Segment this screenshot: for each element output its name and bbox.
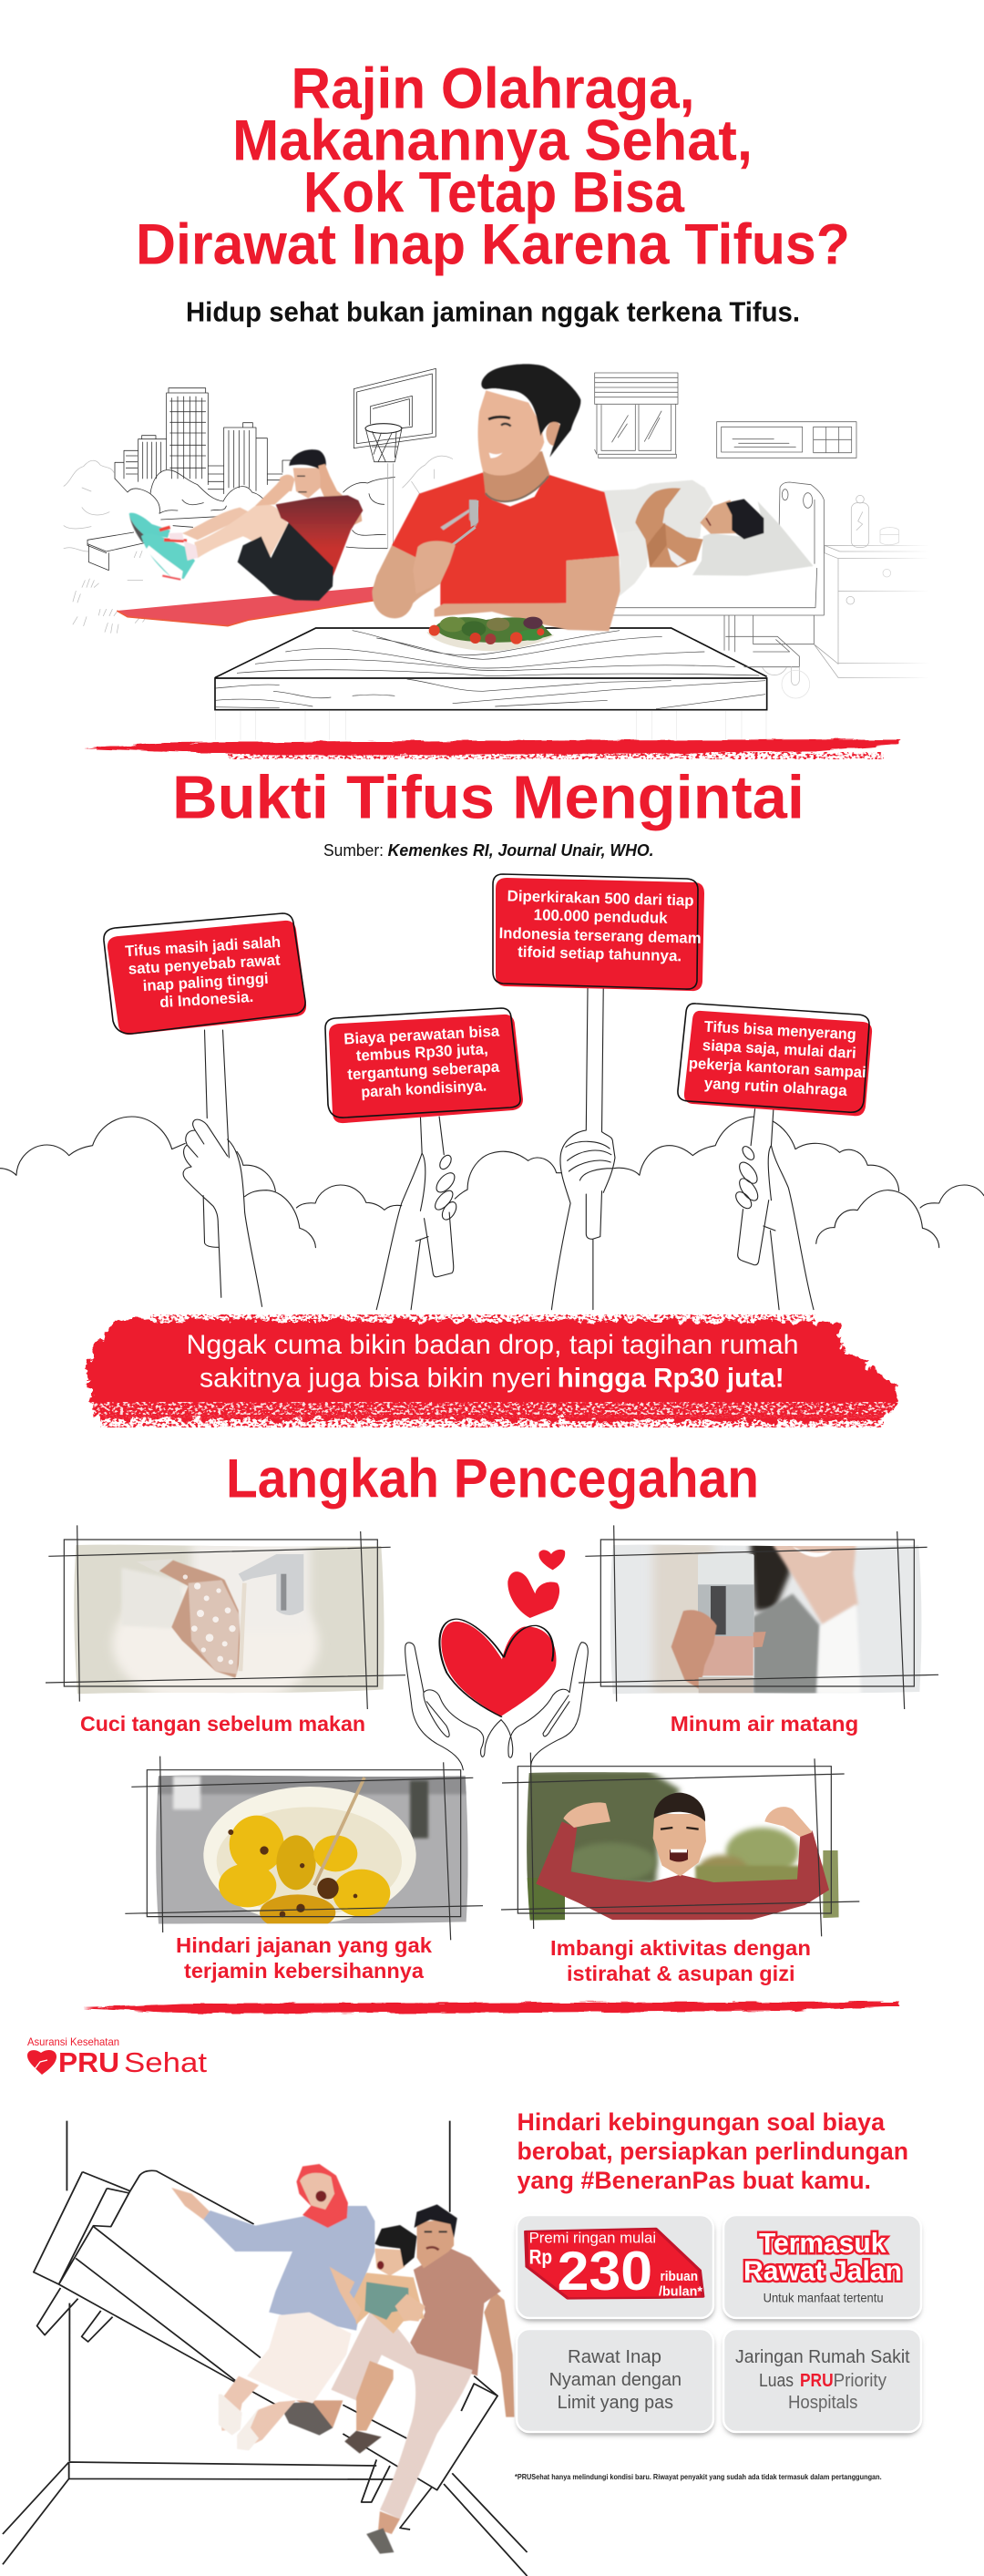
icon: hands outline mirrored [501, 1643, 588, 1766]
sign 4: Tifus bisa menyerang [703, 1018, 856, 1043]
clouds right [492, 1117, 984, 1248]
photo: street food dumplings [152, 1771, 474, 1931]
icon: grass tufts [73, 551, 146, 633]
frame lines: photo 2 [579, 1525, 938, 1709]
subtitle: Hidup sehat bukan jaminan nggak terkena Tifus. [186, 295, 800, 328]
frame lines: photo 3 [125, 1757, 483, 1940]
hand and pole 4 [733, 1109, 814, 1310]
red brush divider bottom [84, 2002, 899, 2014]
clouds left [0, 1117, 492, 1248]
person: sick man sleeping in bed [601, 480, 814, 599]
card: outpatient: Untuk manfaat tertentu [764, 2290, 884, 2304]
logo: PRUSehat: Asuransi Kesehatan [27, 2035, 119, 2048]
clouds and hands right [492, 987, 984, 1310]
logo: PRUSehat: PRU [58, 2046, 119, 2078]
icon: window with blinds [595, 373, 678, 458]
icon: hospital bed frame [610, 482, 824, 698]
icon: hands outline [405, 1643, 501, 1770]
caption 2: Minum air matang [671, 1712, 858, 1736]
photo: drinking water [604, 1540, 927, 1698]
source line: Kemenkes RI, Journal Unair, WHO. [388, 841, 654, 860]
sign 2: tergantung seberapa [347, 1058, 500, 1083]
card: hospital network: Jaringan Rumah Sakit [735, 2347, 910, 2367]
card: inpatient: Rawat Inap [568, 2347, 661, 2367]
caption 3 [176, 1933, 432, 1983]
icon: park bench [87, 517, 219, 571]
person: father [279, 2204, 515, 2554]
sign 3: 100.000 penduduk [533, 906, 668, 927]
title: Dirawat Inap Karena Tifus? [136, 213, 850, 277]
card: hospital network: Hospitals [788, 2393, 857, 2413]
icon: medium heart [507, 1571, 559, 1618]
person: man doing sit-ups [129, 449, 363, 601]
card: premium: Premi ringan mulai [529, 2230, 656, 2246]
heading: Langkah Pencegahan: Langkah Pencegahan [226, 1448, 759, 1510]
fork and hand [413, 500, 478, 594]
frame lines: photo 4 [501, 1753, 859, 1936]
sign 4: siapa saja, mulai dari [702, 1036, 856, 1062]
illustration: heart in hands [405, 1550, 588, 1770]
hero illustration: hospital room and sick man [372, 364, 929, 698]
icon: large heart [439, 1619, 557, 1717]
banner: red brush callout: Nggak cuma bikin badan drop, tapi tagihan rumah [186, 1330, 798, 1360]
logo: PRUSehat: Sehat [124, 2046, 207, 2078]
sign 1: satu penyebab rawat [128, 951, 281, 978]
sign 1: inap paling tinggi [142, 970, 269, 994]
family on sliding bed [171, 2164, 515, 2554]
sign 3: Indonesia terserang demam [498, 924, 702, 947]
icon: bushes [64, 456, 453, 551]
photo: man flexing muscles [522, 1768, 845, 1923]
banner: red brush callout: sakitnya juga bisa bikin nyeri [200, 1364, 551, 1393]
sign 2: Biaya perawatan bisa [343, 1023, 500, 1047]
person: central man eating salad [372, 364, 620, 631]
exercise mat [117, 586, 376, 626]
icon: basketball hoop [354, 368, 436, 549]
logo: PRUSehat [27, 2035, 207, 2078]
clouds and hands left [0, 1030, 492, 1310]
icon: small heart [538, 1550, 565, 1570]
card: inpatient: Limit yang pas [558, 2393, 673, 2413]
illustration: tilted bed and room outline [3, 2121, 528, 2576]
sign 3: tifoid setiap tahunnya. [518, 943, 682, 964]
title [136, 57, 850, 277]
card: hospital network [723, 2329, 921, 2435]
headline: protection call to action: Hindari kebingungan soal biaya [518, 2108, 886, 2136]
card: premium [517, 2215, 713, 2321]
headline: protection call to action [518, 2108, 908, 2194]
red brush divider top [84, 739, 899, 759]
sign 1 [104, 913, 306, 1035]
card: inpatient: Nyaman dengan [549, 2370, 682, 2390]
sign 2: parah kondisinya. [361, 1077, 487, 1101]
sign 4: pekerja kantoran sampai [688, 1055, 866, 1081]
card: outpatient [723, 2215, 921, 2321]
source line: Sumber: [323, 841, 384, 860]
caption 4 [550, 1936, 811, 1985]
heading: Bukti Tifus Mengintai: Bukti Tifus Mengintai [172, 764, 805, 831]
hand and pole 3 [551, 987, 615, 1310]
icon: air conditioner panel [717, 422, 856, 458]
sign 3 [493, 874, 704, 991]
card: hospital network: PRU [800, 2371, 834, 2391]
card: inpatient [517, 2329, 713, 2435]
caption 3: Hindari jajanan yang gak [176, 1933, 432, 1957]
sign 2 [325, 1008, 523, 1123]
title: Rajin Olahraga, [292, 57, 694, 120]
sign 1: di Indonesia. [159, 988, 254, 1011]
photo: washing hands [74, 1544, 384, 1694]
banner: red brush callout [77, 1314, 902, 1427]
card: premium: 230 [558, 2241, 652, 2302]
hero illustration: exercising man, city and basketball hoop [64, 368, 453, 633]
sign 2: tembus Rp30 juta, [355, 1040, 488, 1065]
card: premium: /bulan* [659, 2284, 702, 2299]
caption 3: terjamin kebersihannya [184, 1959, 424, 1983]
footnote: *PRUSehat hanya melindungi kondisi baru. Riwayat penyakit yang sudah ada tidak termasuk dalam pertanggungan. [515, 2473, 882, 2481]
icon: city buildings [115, 388, 292, 494]
card: outpatient: Rawat Jalan [743, 2255, 902, 2286]
headline: protection call to action: berobat, persiapkan perlindungan [518, 2138, 908, 2165]
title: Kok Tetap Bisa [303, 160, 685, 224]
card: premium: Rp [529, 2246, 552, 2268]
caption 4: Imbangi aktivitas dengan [550, 1936, 811, 1960]
title: Makanannya Sehat, [232, 109, 753, 173]
caption 4: istirahat & asupan gizi [567, 1962, 795, 1985]
card: hospital network: Priority [834, 2371, 887, 2391]
table top and front, wood grain [215, 628, 767, 740]
sign 4: yang rutin olahraga [703, 1075, 848, 1099]
caption 1: Cuci tangan sebelum makan [80, 1712, 365, 1736]
card: premium: ribuan [660, 2269, 698, 2284]
hand and pole 2 [376, 1117, 459, 1310]
sign 3: Diperkirakan 500 dari tiap [507, 887, 694, 910]
card: hospital network: Luas [759, 2371, 794, 2391]
person: child [330, 2225, 425, 2454]
headline: protection call to action: yang #BeneranPas buat kamu. [518, 2167, 871, 2194]
sign 4 [678, 1004, 872, 1116]
person: mother [171, 2164, 374, 2450]
banner: red brush callout: hingga Rp30 juta! [558, 1364, 784, 1393]
card: outpatient: Termasuk [759, 2227, 887, 2259]
salad plate [426, 617, 554, 651]
icon: bedside cabinet, bottle and jar [814, 495, 929, 677]
hand and pole 1 [183, 1030, 262, 1306]
sign 1: Tifus masih jadi salah [125, 933, 282, 960]
frame lines: photo 1 [46, 1525, 405, 1709]
